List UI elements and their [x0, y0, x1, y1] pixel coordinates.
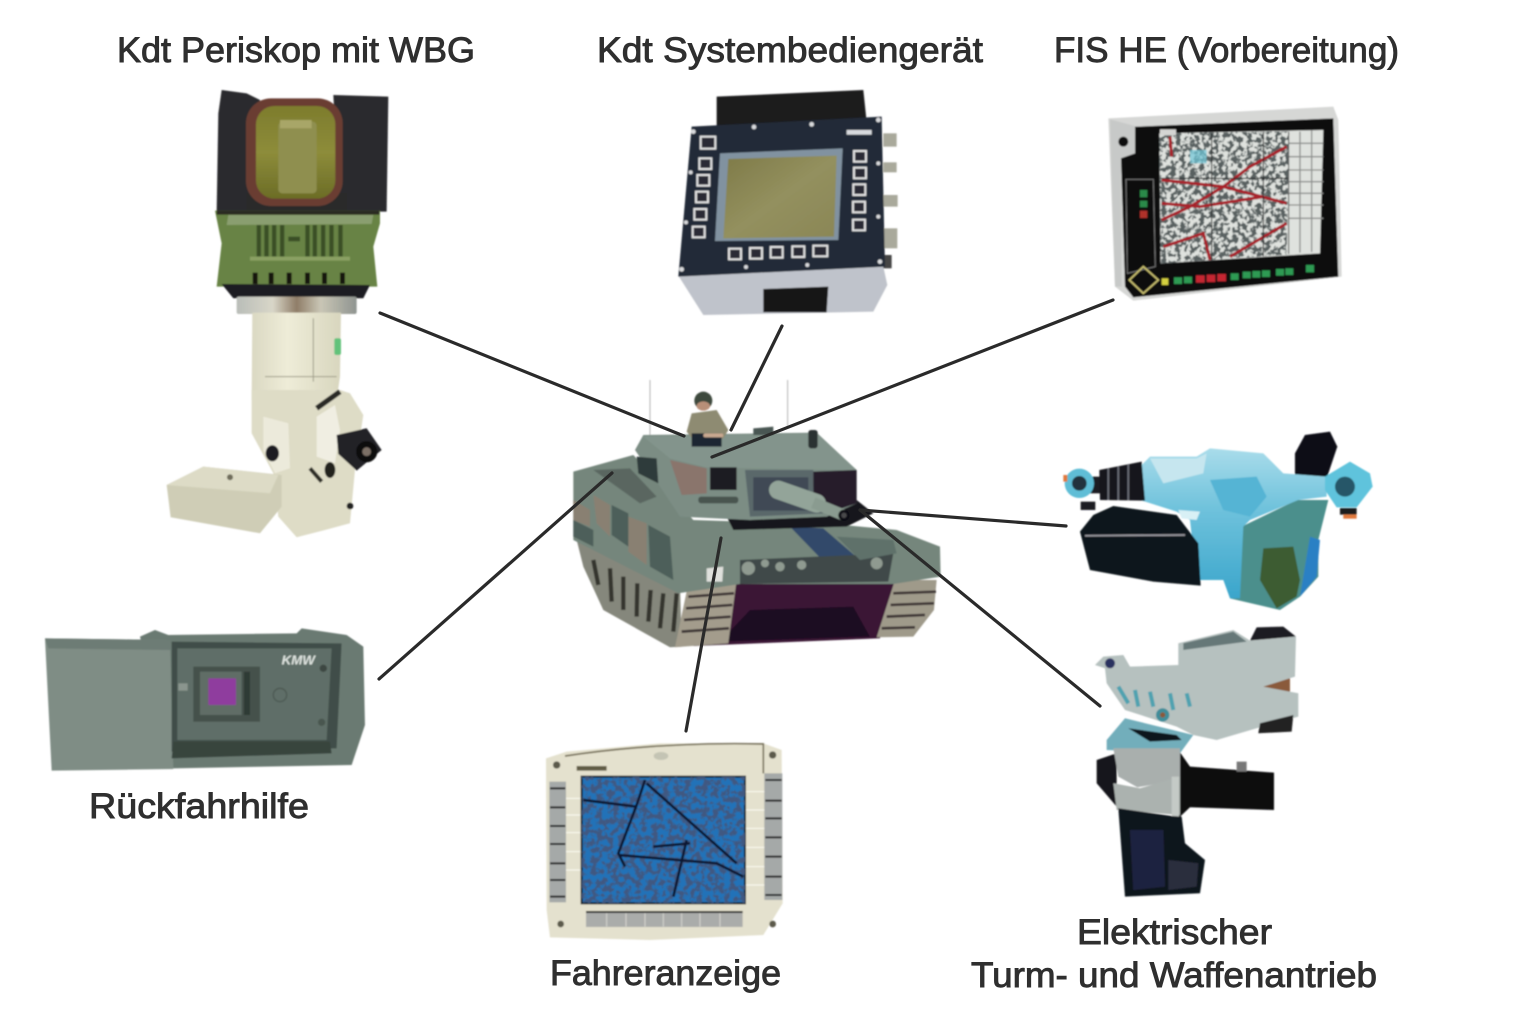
arrow: FIS HE to tank: [712, 300, 1113, 457]
gun: [778, 490, 817, 503]
heading: Kdt Systembediengerät: Kdt Systembediengerät: [597, 31, 983, 70]
arrow: reversing aid to tank: [379, 473, 612, 679]
label: Turm- und Waffenantrieb: Turm- und Waffenantrieb: [971, 956, 1377, 995]
body: [215, 211, 380, 287]
label: Rückfahrhilfe: Rückfahrhilfe: [89, 787, 309, 826]
icon: tank photo: [573, 380, 941, 647]
belly: [693, 580, 897, 646]
arrow: turret drive to tank: [860, 510, 1100, 706]
arrow: driver display to tank: [686, 538, 721, 731]
turret shadow: [727, 500, 873, 530]
icon: driver display photo: [546, 743, 783, 940]
map speckle: [1157, 130, 1293, 267]
heading: FIS HE (Vorbereitung): FIS HE (Vorbereitung): [1054, 31, 1399, 70]
label: Elektrischer: Elektrischer: [1077, 913, 1272, 952]
turret: [635, 433, 857, 520]
arrow: actuator to tank: [860, 510, 1066, 526]
turret drive: [1095, 627, 1298, 897]
cylinder: [252, 313, 341, 400]
lower body: [252, 390, 363, 537]
actuator: [1063, 432, 1373, 610]
icon: FIS HE map display photo: [1108, 107, 1342, 301]
icon: periscope photo: [167, 90, 388, 537]
icon: actuator and turret drive photos: [1063, 432, 1373, 897]
arrow: control unit to tank: [731, 326, 782, 430]
box: [167, 467, 282, 533]
heading: Kdt Periskop mit WBG: Kdt Periskop mit WBG: [117, 31, 475, 70]
tracks side: [573, 527, 682, 647]
icon: reversing camera photo: [45, 628, 365, 771]
hull: [573, 455, 941, 593]
logo KMW: KMW: [282, 652, 316, 667]
label: Fahreranzeige: Fahreranzeige: [550, 954, 781, 993]
camera + knobs: [337, 428, 382, 471]
soldier: [687, 410, 728, 440]
arrow: periscope to tank: [380, 313, 684, 436]
tracks front: [675, 580, 737, 647]
icon: commander control unit photo: [678, 90, 898, 315]
